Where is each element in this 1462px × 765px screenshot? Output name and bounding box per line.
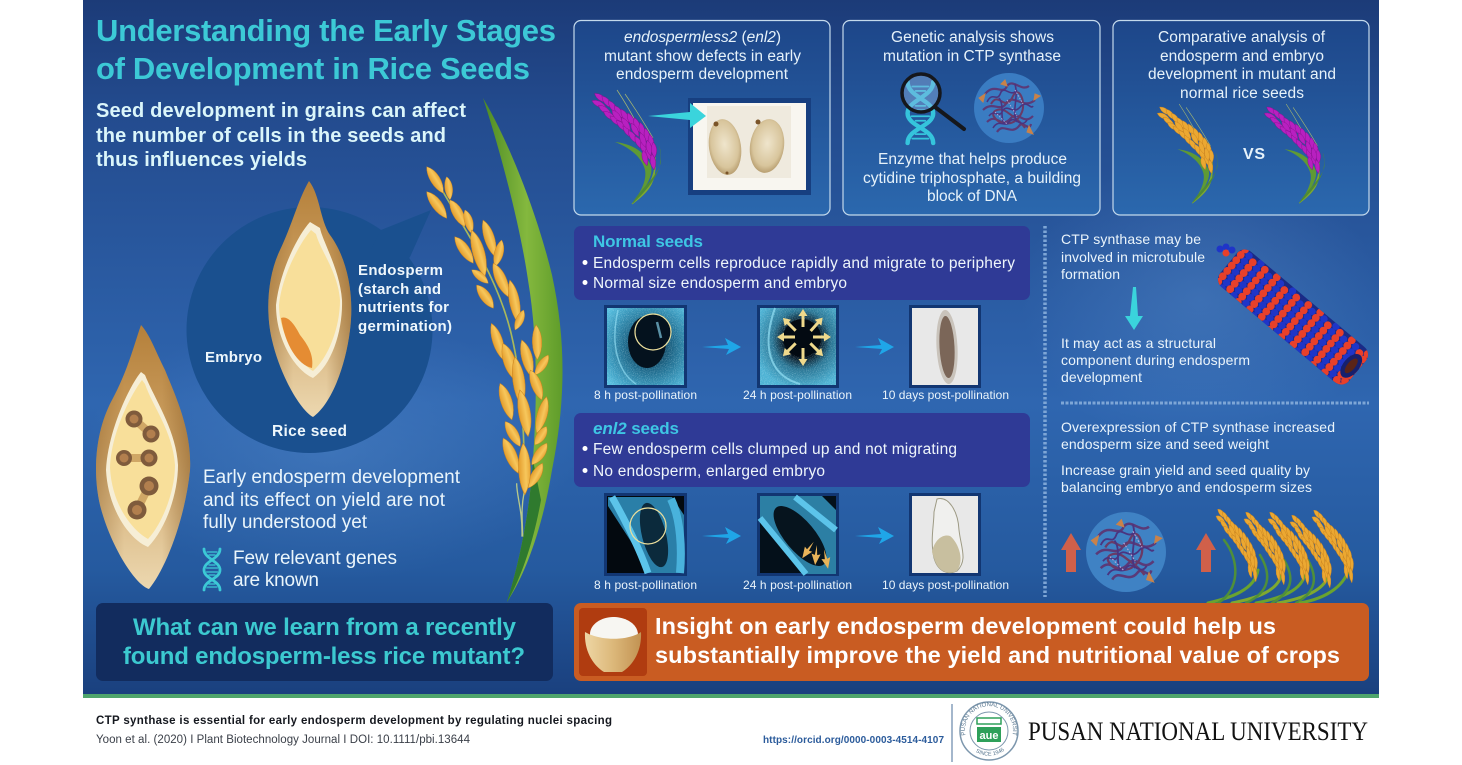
arrow: down (1125, 287, 1143, 330)
panel enzyme text: block of DNA (927, 188, 1018, 205)
citation: CTP synthase is essential for early endosperm development by regulating nuclei spacing (96, 715, 612, 727)
panel: comparative analysis (1113, 20, 1369, 215)
panel text: normal rice seeds (1180, 85, 1304, 102)
text: early endosperm development: and its effect on yield are not (203, 490, 446, 511)
yellow arrows (799, 539, 832, 570)
micrograph: enl2 8 h (606, 494, 686, 574)
ORCID link text: https://orcid.org/0000-0003-4514-4107 (763, 735, 944, 746)
subtitle: thus influences yields (96, 149, 307, 171)
micrograph: enl2 24 h (758, 494, 838, 574)
panel text: endosperm and embryo (1160, 48, 1324, 65)
panel text: Comparative analysis of (1158, 29, 1326, 46)
text: few relevant genes: are known (233, 570, 319, 591)
text: overexpression (1061, 419, 1335, 452)
text: microtubule formation: formation (1061, 266, 1120, 282)
text: structural component: component during endosperm (1061, 352, 1250, 368)
yellow migration arrows (777, 309, 831, 366)
text: few relevant genes (233, 548, 397, 591)
icon: purple rice plant (591, 90, 661, 204)
panel enzyme text (863, 151, 1081, 205)
university seal: PUSAN NATIONAL UNIVERSITY (960, 702, 1018, 736)
icon: rice bowl (579, 608, 647, 676)
conclusion box (574, 603, 1369, 681)
bullet list (582, 441, 957, 480)
subtitle: Seed development in grains can affect (96, 100, 466, 122)
text: increase grain yield: Increase grain yield and seed quality by (1061, 462, 1310, 478)
arrow (855, 338, 894, 355)
bullet list: Endosperm cells reproduce rapidly and migrate to periphery (593, 255, 1015, 272)
title: of Development in Rice Seeds (96, 51, 530, 86)
icon: rice bunch (1208, 507, 1354, 603)
conclusion text: substantially improve the yield and nutritional value of crops (655, 642, 1340, 668)
label: endosperm: (starch and (358, 281, 441, 298)
subtitle (96, 100, 466, 171)
conclusion text (655, 613, 1340, 668)
captions: normal seeds: 8 h post-pollination (594, 388, 697, 402)
panel heading text: Genetic analysis shows (891, 29, 1054, 46)
text: early endosperm development (203, 467, 461, 533)
question text: What can we learn from a recently (133, 614, 517, 641)
micrograph: enl2 10 days (910, 494, 980, 574)
panel: enl2 seeds (574, 413, 1030, 487)
university name: PUSAN NATIONAL UNIVERSITY (1028, 717, 1368, 746)
panel enzyme text: cytidine triphosphate, a building (863, 170, 1081, 187)
captions: enl2 seeds: 8 h post-pollination (594, 578, 697, 592)
icon: rice seed cross-section (268, 181, 351, 417)
panel heading text: mutation in CTP synthase (883, 48, 1061, 65)
text: increase grain yield (1061, 462, 1312, 495)
arrow: plant to photo (648, 103, 706, 128)
icon: microtubule (1216, 244, 1368, 384)
arrow (855, 527, 894, 544)
university seal: aue (980, 730, 998, 742)
text: early endosperm development: Early endosperm development (203, 467, 461, 488)
icon: rice leaf (483, 98, 562, 602)
captions: enl2 seeds: 10 days post-pollination (882, 578, 1009, 592)
text: early endosperm development: fully understood yet (203, 512, 368, 533)
captions: enl2 seeds (594, 578, 1009, 592)
question box (96, 603, 553, 681)
heading: enl2 seeds: enl2 seeds (593, 419, 679, 438)
bullet list: Normal size endosperm and embryo (593, 275, 847, 292)
panel: enl2 mutant (574, 20, 830, 215)
seed photo (688, 98, 811, 195)
callout circle: rice seed (186, 207, 432, 453)
panel text: mutant show defects in early (604, 48, 801, 65)
icon: DNA helix (204, 549, 220, 590)
bullet list: Few endosperm cells clumped up and not migrating (593, 441, 957, 458)
label: embryo: Embryo (205, 349, 262, 366)
micrograph: normal 10 days (910, 306, 980, 386)
captions: normal seeds: 24 h post-pollination (743, 388, 852, 402)
panel text: endospermless2 (enl2) (624, 29, 781, 46)
citation: Yoon et al. (2020) I Plant Biotechnology Journal I DOI: 10.1111/pbi.13644 (96, 734, 471, 746)
label: rice seed: Rice seed (272, 423, 347, 440)
text: structural component: development (1061, 369, 1142, 385)
panel: normal seeds (574, 226, 1030, 300)
text: microtubule formation: involved in microtubule (1061, 249, 1205, 265)
icon: golden rice plant (1156, 104, 1217, 203)
arrow: up, yield (1196, 533, 1216, 572)
bullet list (582, 255, 1015, 292)
panel text: development in mutant and (1148, 66, 1336, 83)
label: VS: VS (1243, 146, 1265, 163)
text: overexpression: Overexpression of CTP synthase increased (1061, 419, 1335, 435)
label: endosperm: nutrients for (358, 299, 449, 316)
label: endosperm: germination) (358, 318, 452, 335)
captions: normal seeds (594, 388, 1009, 402)
bullet list: No endosperm, enlarged embryo (593, 463, 825, 480)
icon: early-stage seed with nuclei (96, 325, 190, 589)
text: overexpression: endosperm size and seed weight (1061, 436, 1269, 452)
green bottom stripe (83, 694, 1379, 698)
panel text (1148, 29, 1336, 102)
icon: golden rice panicle (423, 164, 552, 537)
conclusion text: Insight on early endosperm development could help us (655, 613, 1276, 639)
question text: found endosperm-less rice mutant? (123, 643, 525, 670)
icon: purple rice plant (1263, 104, 1324, 203)
citation (96, 715, 612, 746)
arrow (702, 338, 741, 355)
panel text: endosperm development (616, 66, 789, 83)
panel heading text (883, 29, 1061, 65)
label: endosperm: Endosperm (358, 262, 443, 279)
micrograph: normal 8 h (606, 306, 686, 386)
text: structural component: It may act as a structural (1061, 335, 1216, 351)
text: microtubule formation (1061, 231, 1205, 282)
panel: genetic analysis (843, 20, 1100, 215)
micrograph: normal 24 h (758, 306, 838, 386)
subtitle: the number of cells in the seeds and (96, 125, 446, 147)
arrow (702, 527, 741, 544)
icon: CTP synthase protein (974, 73, 1044, 143)
heading: normal seeds: Normal seeds (593, 232, 703, 251)
university seal (959, 701, 1019, 761)
text: increase grain yield: balancing embryo and endosperm sizes (1061, 479, 1312, 495)
title: Understanding the Early Stages (96, 13, 556, 48)
university seal: SINCE 1946 (976, 748, 1004, 756)
icon: DNA under magnifier (902, 74, 964, 143)
label: endosperm (358, 262, 452, 335)
title (96, 13, 556, 86)
text: microtubule formation: CTP synthase may be (1061, 231, 1201, 247)
icon: protein circle (1086, 512, 1166, 592)
text: few relevant genes: Few relevant genes (233, 548, 397, 569)
arrow: up, enzyme (1061, 533, 1081, 572)
text: structural component (1061, 335, 1250, 385)
captions: normal seeds: 10 days post-pollination (882, 388, 1009, 402)
panel text (604, 29, 801, 83)
panel enzyme text: Enzyme that helps produce (878, 151, 1067, 168)
question text (123, 614, 525, 670)
captions: enl2 seeds: 24 h post-pollination (743, 578, 852, 592)
